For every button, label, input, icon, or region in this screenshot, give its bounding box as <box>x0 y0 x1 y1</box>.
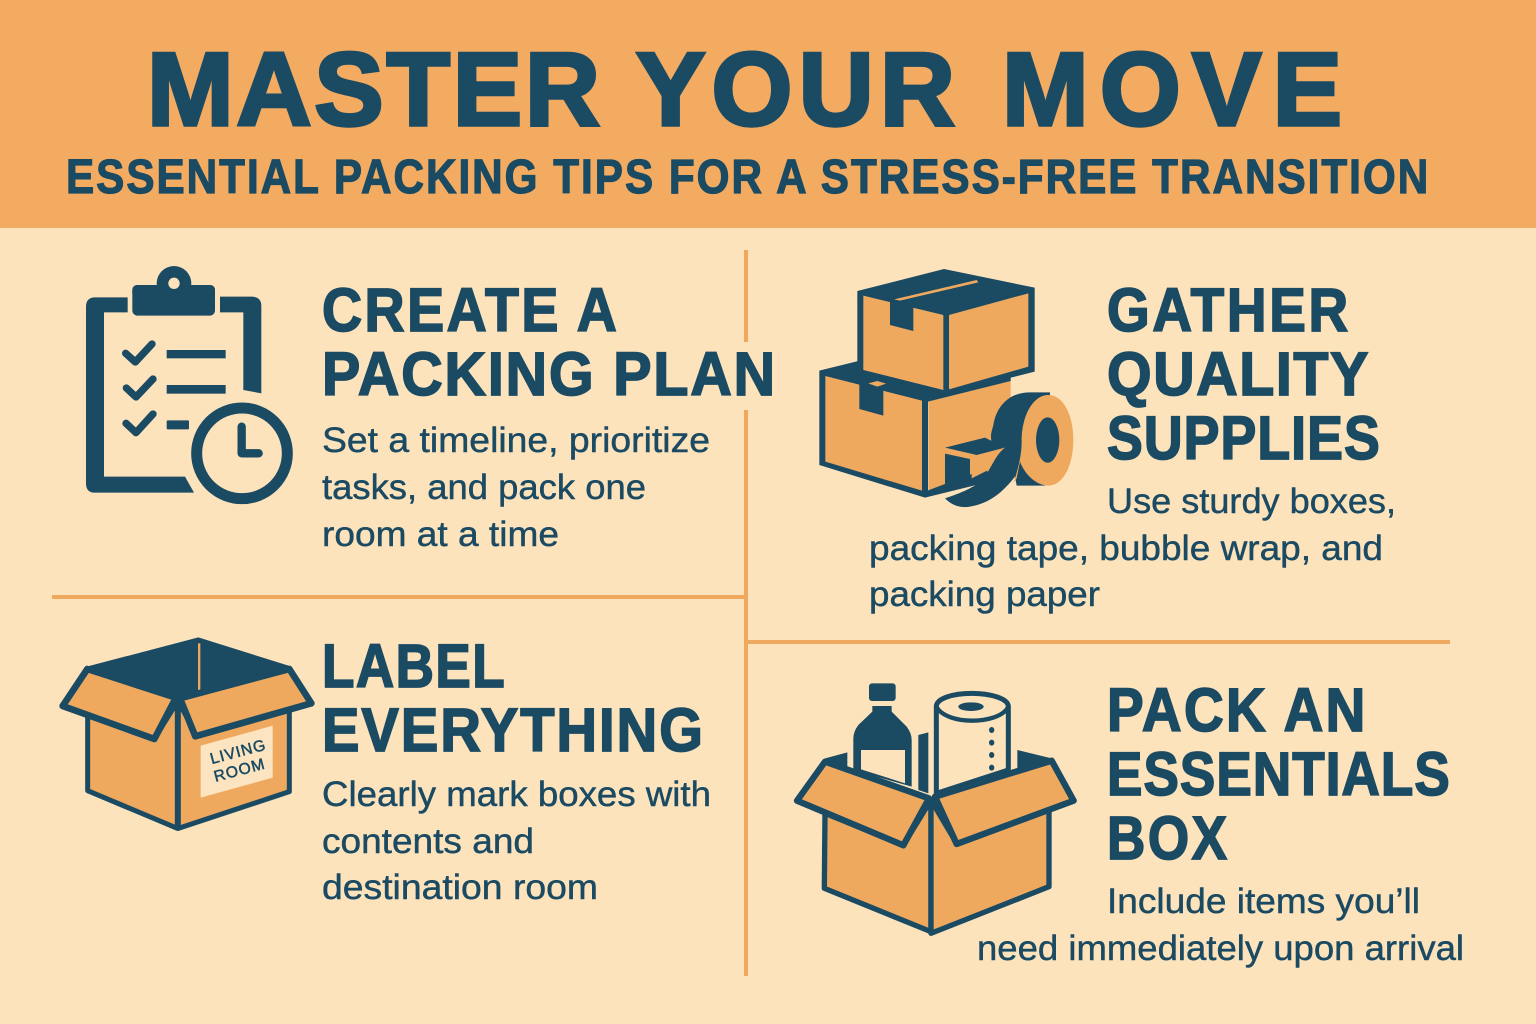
heading: label everything: LABEL <box>322 633 505 701</box>
heading: label everything: EVERYTHING <box>322 697 703 765</box>
heading: pack an essentials box <box>1107 676 1450 873</box>
panel: pack an essentials box <box>797 676 1464 968</box>
body text: create a packing plan: tasks, and pack one <box>322 468 646 507</box>
title: YOUR <box>636 32 955 148</box>
label text: LIVING <box>208 737 268 768</box>
body text: gather quality supplies: packing paper <box>869 575 1100 614</box>
body text: gather quality supplies <box>869 482 1396 614</box>
heading: pack an essentials box: BOX <box>1107 805 1227 873</box>
icon: open box with room label <box>63 637 311 828</box>
heading: gather quality supplies: SUPPLIES <box>1107 405 1380 473</box>
body text: create a packing plan <box>322 421 710 554</box>
heading: gather quality supplies <box>1107 276 1380 473</box>
body text: label everything: destination room <box>322 868 598 907</box>
body text: gather quality supplies: Use sturdy boxes, <box>1107 482 1396 521</box>
heading: pack an essentials box: PACK AN <box>1107 676 1365 745</box>
body text: pack an essentials box: Include items you’ll <box>1107 882 1420 921</box>
body text: pack an essentials box: need immediately upon arrival <box>977 929 1464 968</box>
heading: create a packing plan: PACKING PLAN <box>322 339 775 408</box>
body text: label everything <box>322 775 711 907</box>
heading: gather quality supplies: QUALITY <box>1107 339 1368 408</box>
icon: open box with bottle and paper towel <box>797 683 1074 933</box>
heading: create a packing plan: CREATE A <box>322 277 617 345</box>
label text <box>207 737 273 786</box>
header banner <box>0 0 1536 228</box>
panel: create a packing plan <box>86 266 775 554</box>
body text: gather quality supplies: packing tape, bubble wrap, and <box>869 529 1383 568</box>
icon: clipboard with checklist and clock <box>86 266 287 499</box>
title: MASTER <box>147 32 600 148</box>
body text: create a packing plan: Set a timeline, prioritize <box>322 421 710 460</box>
subtitle: ESSENTIAL PACKING TIPS FOR A STRESS-FREE TRANSITION <box>66 149 1428 204</box>
icon: stacked boxes and tape roll <box>819 269 1073 507</box>
body text: label everything: contents and <box>322 822 534 861</box>
panel: gather quality supplies <box>819 269 1396 614</box>
body text: create a packing plan: room at a time <box>322 515 559 554</box>
heading: pack an essentials box: ESSENTIALS <box>1107 741 1450 809</box>
title <box>147 32 1342 148</box>
heading: gather quality supplies: GATHER <box>1107 276 1348 345</box>
title: MOVE <box>1002 32 1342 148</box>
label text: ROOM <box>212 756 267 786</box>
body text: label everything: Clearly mark boxes with <box>322 775 711 814</box>
body text: pack an essentials box <box>977 882 1464 968</box>
heading: create a packing plan <box>322 277 775 408</box>
heading: label everything <box>322 633 703 765</box>
panel: label everything <box>63 633 711 907</box>
